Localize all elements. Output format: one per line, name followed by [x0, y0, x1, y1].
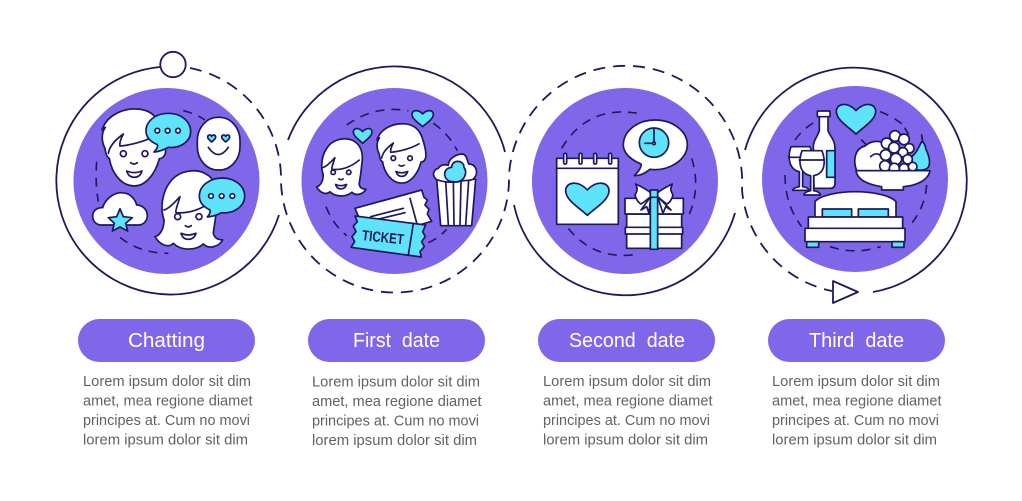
pill: third date: Third date — [809, 330, 904, 352]
text block: third date: Lorem ipsum dolor sit dim — [772, 373, 940, 390]
icon: popcorn bucket — [434, 154, 477, 226]
icon: smiley with heart eyes — [197, 117, 240, 170]
icon: large heart — [412, 111, 433, 127]
text block: third date — [772, 373, 942, 448]
text block: second date: amet, mea regione diamet — [543, 392, 713, 410]
icon: girl speech bubble — [199, 178, 245, 217]
icon: boy face — [102, 109, 166, 186]
text block: chatting: Lorem ipsum dolor sit dim — [83, 373, 251, 390]
panel: first date illustration — [302, 88, 488, 274]
purple disc — [762, 86, 948, 272]
icon group: first date — [317, 109, 477, 257]
panel: third date illustration — [762, 86, 948, 272]
inner dashed arcs — [96, 111, 205, 253]
icon: girl face — [155, 171, 223, 249]
purple disc — [74, 88, 260, 274]
step: chatting — [78, 319, 255, 448]
pill: first date: First date — [353, 330, 440, 352]
inner dashed arcs — [562, 112, 696, 255]
ring: second date — [514, 205, 735, 295]
pill: first date — [308, 319, 485, 362]
text block: second date: lorem ipsum dolor sit dim — [543, 432, 708, 448]
panel: second date illustration — [532, 88, 718, 274]
pill: third date — [768, 319, 945, 362]
text block: first date — [312, 374, 482, 449]
panel: chatting illustration — [74, 88, 260, 274]
text block: second date — [543, 373, 713, 448]
icon: wine glasses — [789, 147, 824, 195]
pill: second date — [538, 319, 715, 362]
icon group: second date — [557, 112, 696, 255]
start marker circle — [160, 52, 186, 77]
text block: chatting: principes at. Cum no movi — [83, 412, 250, 429]
text block: third date: amet, mea regione diamet — [772, 392, 942, 410]
icon: front ticket — [351, 216, 426, 257]
pill: chatting: Chatting — [128, 330, 205, 352]
arrow: end triangle — [833, 281, 858, 303]
icon: gift box — [625, 184, 683, 249]
ring: first date — [288, 66, 505, 152]
icon: fruit bowl — [855, 128, 930, 190]
icon: girl face — [317, 139, 366, 196]
step: first date — [308, 319, 485, 449]
text block: chatting: amet, mea regione diamet — [83, 392, 253, 410]
icon: boy face — [377, 124, 426, 183]
icon: back ticket — [355, 190, 432, 227]
icon: cloud with star — [93, 193, 147, 231]
text block: first date: Lorem ipsum dolor sit dim — [312, 374, 480, 390]
text block: third date: lorem ipsum dolor sit dim — [772, 432, 937, 448]
connector: dashed timeline path — [190, 66, 832, 293]
icon group: third date — [785, 104, 930, 251]
icon: calendar with heart — [557, 153, 618, 224]
text block: first date: lorem ipsum dolor sit dim — [312, 432, 477, 449]
text block: chatting: lorem ipsum dolor sit dim — [83, 432, 248, 448]
text block: third date: principes at. Cum no movi — [772, 412, 939, 429]
pill: second date: Second date — [569, 330, 685, 352]
text block: chatting — [83, 373, 253, 448]
step: third date — [768, 319, 945, 448]
text block: second date: principes at. Cum no movi — [543, 412, 710, 429]
icon: boy speech bubble — [146, 113, 191, 152]
inner dashed arcs — [326, 109, 457, 243]
ring: third date — [745, 68, 967, 292]
purple disc — [532, 88, 718, 274]
icon: bed — [805, 192, 905, 247]
purple disc — [302, 88, 488, 274]
pill: chatting — [78, 319, 255, 362]
ring: chatting — [56, 67, 279, 295]
icon: wine bottle — [813, 111, 835, 188]
text block: first date: amet, mea regione diamet — [312, 393, 482, 410]
text block: second date: Lorem ipsum dolor sit dim — [543, 373, 711, 390]
step: second date — [538, 319, 715, 448]
icon: heart — [836, 104, 876, 134]
icon group: chatting faces — [93, 109, 245, 253]
icon: small heart — [353, 129, 372, 143]
text block: first date: principes at. Cum no movi — [312, 412, 479, 430]
ticket label: TICKET — [361, 228, 405, 248]
icon: speech bubble with clock — [623, 120, 687, 176]
inner dashed arcs — [785, 112, 927, 251]
